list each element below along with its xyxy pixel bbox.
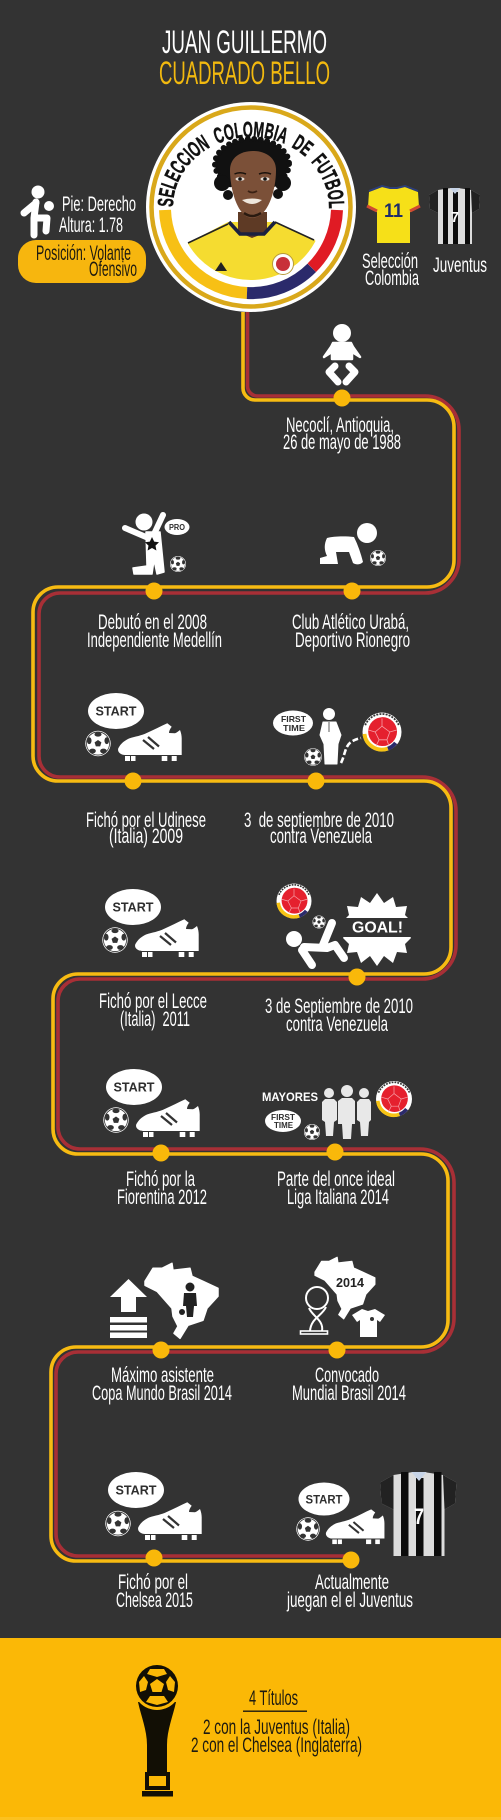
icon: 2014 trophy, map and shirt: 2014 (336, 1276, 364, 1290)
position pill: Posición: Volante (36, 242, 131, 265)
text: top assister: Máximo asistente (111, 1364, 214, 1387)
timeline dots (124, 390, 366, 1568)
text: World Cup call-up: Convocado (315, 1364, 379, 1387)
icon: senior team first time: MAYORES (262, 1092, 318, 1104)
icon: goal with bicycle kick: GOAL! (352, 920, 403, 936)
icon: start boot Chelsea: START (116, 1483, 157, 1498)
icon: large Juventus jersey (380, 1472, 456, 1556)
icon: start boot Fiorentina (103, 1069, 200, 1137)
text: current club (286, 1571, 413, 1612)
icon: start boot Udinese: START (96, 704, 137, 719)
icon: professional player: PRO (169, 523, 185, 532)
text: birth (283, 414, 401, 454)
text: World Cup call-up: Mundial Brasil 2014 (292, 1382, 406, 1405)
icon: start boot Juventus (296, 1482, 384, 1544)
text: birth: Necoclí, Antioquia, (286, 414, 394, 437)
title: JUAN GUILLERMO (162, 24, 327, 60)
icon: senior team first time: TIME (274, 1121, 294, 1130)
text: World Cup call-up (292, 1364, 406, 1405)
text: first goal: 3 de Septiembre de 2010 (265, 995, 413, 1018)
PRO bubble (164, 519, 190, 535)
text: titles list: 2 con la Juventus (Italia) (203, 1716, 350, 1739)
text: foot and height (59, 193, 136, 237)
timeline path: yellow line (33, 312, 454, 1561)
text: youth clubs: Club Atlético Urabá, (292, 611, 409, 634)
text: titles list: 2 con el Chelsea (Inglaterra) (191, 1734, 362, 1757)
icon: start boot Udinese (85, 693, 182, 761)
text: top assister (92, 1364, 232, 1405)
text: current club: Actualmente (315, 1571, 389, 1594)
text: first goal (265, 995, 413, 1036)
icon: Juventus jersey (429, 188, 480, 244)
text: Fiorentina (117, 1168, 207, 1209)
text: jersey labels (362, 250, 487, 290)
icon: goal with bicycle kick (276, 884, 414, 966)
text: Lecce: Fichó por el Lecce (99, 990, 207, 1013)
text: national team debut: 3 de septiembre de 2010 (244, 809, 394, 832)
text: titles heading: 4 Títulos (249, 1687, 298, 1710)
panel: titles (0, 1638, 501, 1820)
text: top assister: Copa Mundo Brasil 2014 (92, 1382, 232, 1405)
text: Udinese (86, 809, 206, 848)
text: Udinese: Fichó por el Udinese (86, 809, 206, 832)
text: titles list (191, 1716, 362, 1757)
text: Lecce (99, 990, 207, 1031)
colombia crest (272, 254, 294, 274)
title: CUADRADO BELLO (159, 55, 330, 91)
text: Chelsea (116, 1571, 193, 1612)
adidas logo (215, 262, 227, 271)
text: youth clubs: Deportivo Rionegro (295, 629, 410, 652)
text: titles heading (243, 1687, 307, 1712)
text: youth clubs (292, 611, 410, 652)
icon: crawling child with ball (320, 523, 386, 566)
text: national team debut: contra Venezuela (270, 825, 372, 848)
text: Lecce: (Italia) 2011 (120, 1008, 190, 1031)
icon: 2014 trophy, map and shirt (300, 1257, 385, 1337)
text: ideal eleven: Liga Italiana 2014 (287, 1186, 389, 1209)
icon: start boot Lecce (102, 889, 199, 957)
position pill (18, 240, 146, 283)
text: current club: juegan el el Juventus (286, 1589, 413, 1612)
timeline path: red line (39, 312, 459, 1556)
text: Chelsea: Chelsea 2015 (116, 1589, 193, 1612)
text: debut: Independiente Medellín (87, 629, 222, 652)
icon: first time with Colombia: FIRST (281, 714, 307, 724)
circular badge with portrait: SELECCION COLOMBIA DE FUTBOL (158, 122, 344, 208)
icon: Juventus jersey: 7 (451, 209, 459, 226)
portrait: Cuadrado (188, 136, 316, 280)
goal burst (343, 893, 411, 966)
text: Udinese: (Italia) 2009 (109, 825, 183, 848)
icon: large Juventus jersey: 7 (414, 1504, 424, 1529)
text: ideal eleven (277, 1168, 395, 1209)
star (145, 537, 159, 550)
text: debut: Debutó en el 2008 (98, 611, 207, 634)
text: debut (87, 611, 222, 652)
title (159, 24, 330, 91)
text: jersey labels: Selección (362, 250, 418, 273)
text: Chelsea: Fichó por el (118, 1571, 188, 1594)
tricolour arc (165, 210, 337, 293)
text: national team debut (244, 809, 394, 848)
icon: senior team first time (262, 1081, 412, 1140)
icon: Colombia jersey: 11 (384, 201, 403, 222)
text: ideal eleven: Parte del once ideal (277, 1168, 395, 1191)
icon: baby (324, 324, 360, 382)
text: first goal: contra Venezuela (286, 1013, 388, 1036)
icon: senior team first time: FIRST (271, 1113, 295, 1122)
text: foot and height: Pie: Derecho (62, 193, 136, 216)
icon: start boot Fiorentina: START (114, 1080, 155, 1095)
icon: professional player (125, 514, 190, 574)
text: Fiorentina: Fichó por la (126, 1168, 195, 1191)
circular badge with portrait (146, 102, 356, 312)
curved badge text (173, 137, 329, 207)
icon: trophy (133, 1662, 181, 1796)
icon: player kicking ball (24, 186, 54, 235)
icon: arrow and Brazil map (110, 1263, 218, 1338)
text: Fiorentina: Fiorentina 2012 (117, 1186, 207, 1209)
text: foot and height: Altura: 1.78 (59, 214, 123, 237)
icon: start boot Chelsea (105, 1472, 202, 1540)
icon: start boot Lecce: START (112, 900, 154, 915)
icon: start boot Juventus: START (306, 1492, 343, 1506)
text: jersey labels: Colombia (365, 267, 419, 290)
icon: Colombia jersey (367, 186, 420, 243)
text: birth: 26 de mayo de 1988 (283, 431, 401, 454)
icon: first time with Colombia (273, 708, 402, 766)
icon: first time with Colombia: TIME (283, 723, 305, 733)
position pill: Ofensivo (89, 258, 137, 281)
